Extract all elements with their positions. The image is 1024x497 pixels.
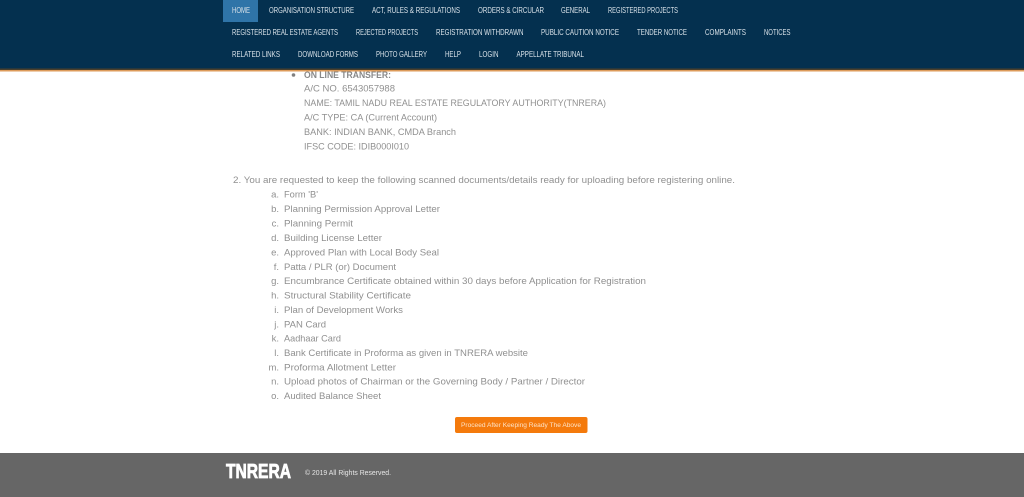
proceed button: Proceed After Keeping Ready The Above (461, 422, 581, 429)
list of required documents: Approved Plan with Local Body Seal (284, 248, 439, 258)
menu row 2: PUBLIC CAUTION NOTICE (541, 27, 619, 37)
list of required documents: Structural Stability Certificate (284, 290, 411, 302)
list of required documents: f. (274, 262, 279, 273)
list of required documents: Encumbrance Certificate obtained within 30 days before Application for Registration (284, 276, 646, 287)
list of required documents: Bank Certificate in Proforma as given in TNRERA website (284, 348, 528, 359)
list of required documents: e. (271, 248, 279, 258)
list of required documents: a. (271, 190, 279, 200)
menu row 3: DOWNLOAD FORMS (298, 49, 358, 59)
list of required documents: h. (271, 290, 279, 302)
list of required documents: o. (271, 391, 279, 402)
list of required documents: m. (268, 362, 279, 374)
proceed button (455, 417, 588, 433)
menu row 2: REGISTRATION WITHDRAWN (436, 27, 524, 37)
list of required documents: Building License Letter (284, 233, 382, 244)
menu row 1: GENERAL (561, 5, 590, 15)
menu row 2 (232, 27, 791, 37)
menu row 3: RELATED LINKS (232, 49, 280, 59)
list of required documents: PAN Card (284, 320, 326, 330)
online transfer bank details (292, 70, 606, 152)
menu row 2: TENDER NOTICE (637, 27, 687, 37)
instruction text: 2. You are requested to keep the following scanned documents/details ready for uploading before registering online. (233, 175, 735, 186)
list of required documents: Audited Balance Sheet (284, 391, 381, 402)
menu row 1: ORGANISATION STRUCTURE (269, 5, 354, 15)
list of required documents: Form 'B' (284, 190, 318, 200)
list of required documents: i. (274, 305, 279, 316)
list of required documents: Planning Permission Approval Letter (284, 204, 440, 215)
list of required documents: Proforma Allotment Letter (284, 362, 396, 374)
list of required documents: l. (274, 348, 279, 359)
menu row 3: PHOTO GALLERY (376, 49, 427, 59)
footer (0, 453, 1024, 497)
menu row 1: REGISTERED PROJECTS (608, 5, 678, 15)
list of required documents: b. (271, 204, 279, 215)
menu row 2: REGISTERED REAL ESTATE AGENTS (232, 27, 338, 37)
online transfer bank details: A/C NO. 6543057988 (304, 84, 395, 94)
menu row 3 (232, 49, 584, 59)
list of required documents: Plan of Development Works (284, 305, 403, 316)
list of required documents: Upload photos of Chairman or the Governing Body / Partner / Director (284, 376, 585, 388)
active menu item: home (223, 0, 258, 22)
list of required documents: d. (271, 233, 279, 244)
online transfer bank details: A/C TYPE: CA (Current Account) (304, 112, 437, 124)
copyright: © 2019 All Rights Reserved. (305, 468, 391, 477)
online transfer heading: ON LINE TRANSFER: (304, 70, 391, 81)
menu row 1: ORDERS & CIRCULAR (478, 5, 544, 15)
menu row 2: REJECTED PROJECTS (356, 27, 418, 37)
list of required documents: Planning Permit (284, 218, 353, 230)
list of required documents: j. (273, 320, 279, 330)
menu row 2: COMPLAINTS (705, 27, 746, 37)
list of required documents: Aadhaar Card (284, 334, 341, 344)
list of required documents: Patta / PLR (or) Document (284, 262, 396, 273)
online transfer bank details: BANK: INDIAN BANK, CMDA Branch (304, 127, 456, 138)
online transfer bank details: NAME: TAMIL NADU REAL ESTATE REGULATORY AUTHORITY(TNRERA) (304, 98, 606, 109)
list of required documents: n. (271, 376, 279, 388)
navigation bar (0, 0, 1024, 72)
list of required documents: g. (271, 276, 279, 287)
list of required documents: k. (272, 334, 279, 344)
menu row 3: HELP (445, 49, 461, 59)
menu row 3: APPELLATE TRIBUNAL (516, 49, 584, 59)
menu row 1 (269, 5, 678, 15)
active menu item: home: HOME (232, 5, 250, 15)
menu row 3: LOGIN (479, 49, 498, 59)
footer logo: TNRERA (226, 461, 291, 483)
menu row 1: ACT, RULES & REGULATIONS (372, 5, 460, 15)
online transfer bank details: IFSC CODE: IDIB000I010 (304, 142, 409, 152)
list of required documents: c. (272, 218, 279, 230)
bullet (292, 73, 295, 77)
menu row 2: NOTICES (764, 27, 791, 37)
list of required documents (268, 190, 646, 402)
